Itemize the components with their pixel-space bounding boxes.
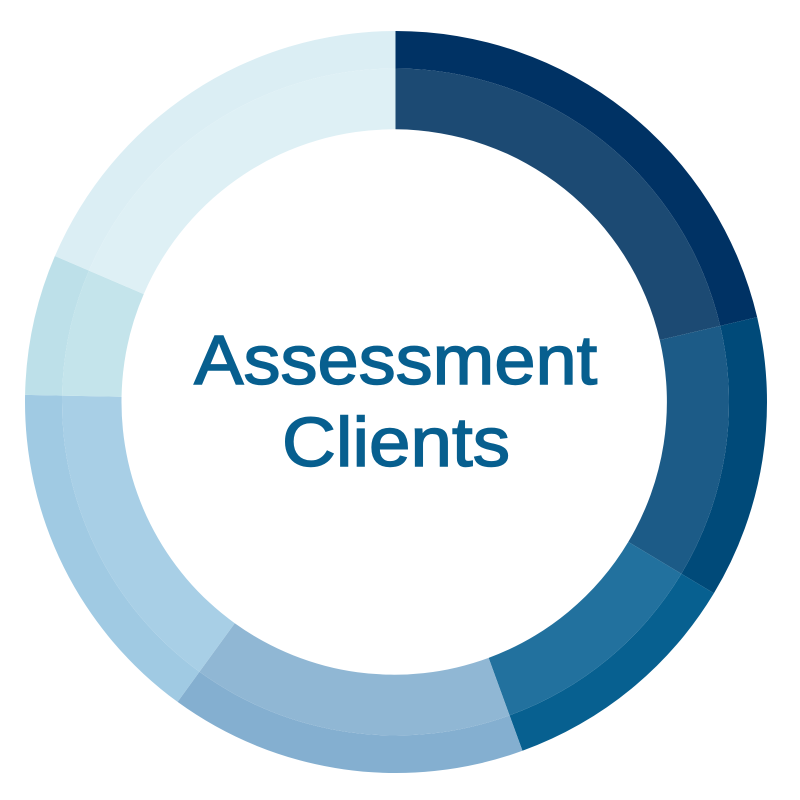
segment 1: darkest navy	[396, 31, 757, 340]
center title: Clients	[282, 403, 510, 481]
center title	[194, 321, 597, 481]
segment 4: steel blue	[178, 623, 522, 773]
center title: Assessment	[194, 321, 597, 399]
segment 2: dark blue	[628, 317, 767, 593]
segment 5: light blue	[25, 395, 235, 702]
segment 3: medium blue	[489, 542, 714, 751]
segment 7: palest aqua	[55, 31, 396, 294]
segment 6: pale aqua	[25, 256, 144, 397]
